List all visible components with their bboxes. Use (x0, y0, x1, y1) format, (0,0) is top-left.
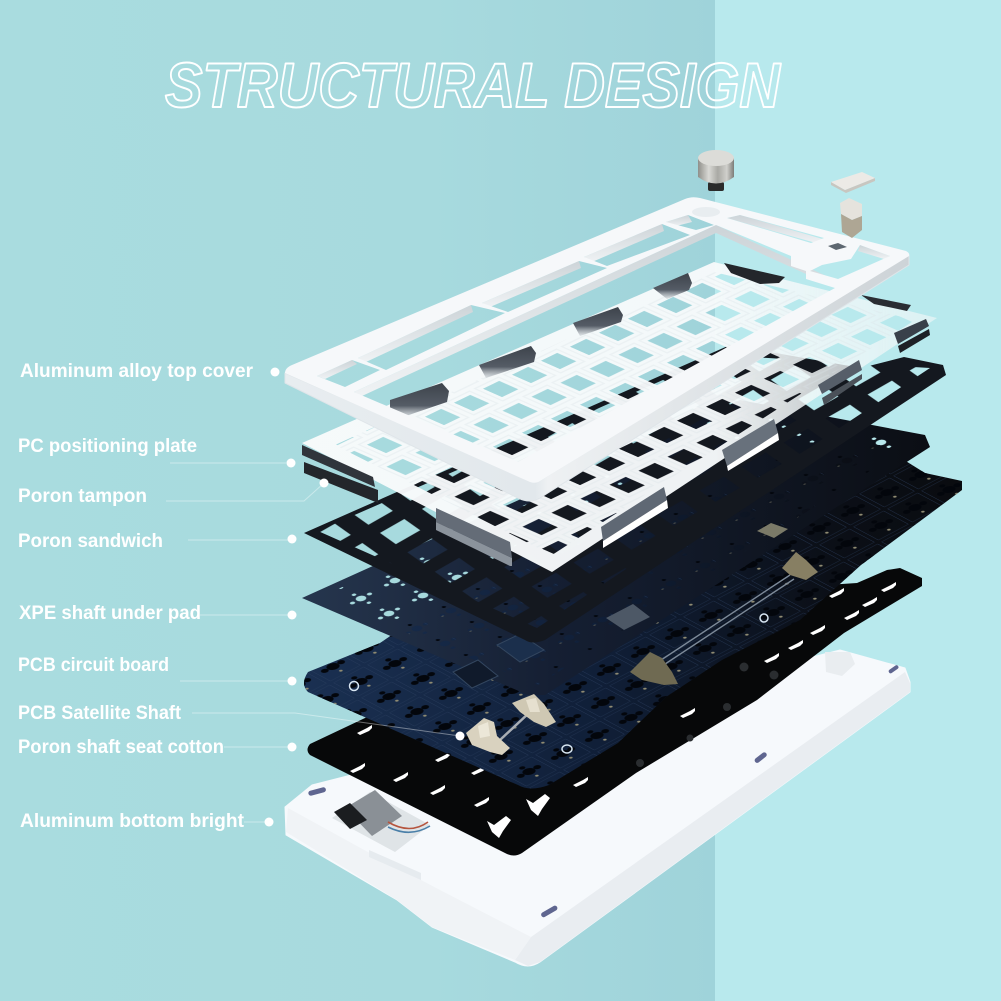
label: aluminum alloy top cover: Aluminum alloy top cover (20, 361, 254, 382)
layer: poron sandwich (304, 345, 946, 642)
case outer body (285, 650, 910, 966)
layer: aluminum alloy top cover (285, 197, 909, 501)
switch socket post (825, 652, 855, 676)
label: PCB satellite shaft (18, 703, 464, 740)
poron block left 2 (436, 508, 512, 566)
frame knob recess (692, 207, 720, 217)
cotton round holes (636, 662, 778, 767)
frame inner walls (317, 215, 890, 396)
label: aluminum bottom bright: Aluminum bottom bright (20, 811, 245, 832)
label: XPE shaft under pad (19, 603, 296, 624)
label: PCB circuit board (18, 655, 296, 686)
cap side (831, 178, 875, 193)
case inner ledge (369, 850, 421, 880)
block stem (841, 214, 862, 238)
background left wall (0, 0, 715, 1001)
title: STRUCTURAL DESIGN (165, 51, 781, 121)
stabilizer wire left (500, 712, 530, 740)
plate inner lines (340, 272, 837, 523)
stabilizer housing front (466, 718, 510, 755)
frame switch opening (828, 243, 847, 250)
label: XPE shaft under pad: XPE shaft under pad (19, 603, 201, 624)
sliding block piece (840, 198, 862, 238)
label: PC positioning plate (18, 436, 296, 468)
frame top face (285, 197, 909, 483)
pcb board (304, 440, 962, 788)
label: poron tampon (18, 478, 328, 507)
layer: aluminum bottom case (285, 650, 910, 966)
background right wall (715, 0, 1001, 1001)
stabilizer wire right (652, 575, 794, 670)
key cap piece (831, 172, 875, 193)
case right side wall (515, 672, 910, 966)
case left side wall (286, 808, 531, 960)
poron block right 1 (894, 319, 930, 353)
frame side faces (285, 255, 909, 501)
pcb switch footprints (304, 440, 962, 788)
layer: poron shaft seat cotton (308, 568, 922, 856)
poron block left 1 (302, 445, 378, 503)
layer: PCB circuit board (304, 440, 962, 788)
poron block right 2 (818, 360, 862, 405)
label: poron sandwich: Poron sandwich (18, 531, 163, 552)
block head (840, 198, 862, 220)
stabilizer housing olive upper (782, 552, 818, 580)
layer: PC positioning plate (302, 262, 937, 572)
label: PCB satellite shaft: PCB Satellite Shaft (18, 703, 182, 724)
poron block right 3 (722, 419, 779, 471)
poron block far 1 (390, 383, 449, 418)
label: poron sandwich (18, 531, 296, 552)
pcb silkscreen rings (350, 614, 768, 753)
case screw slots (308, 664, 899, 918)
cotton white slots (350, 582, 896, 838)
poron block far 2 (479, 346, 536, 378)
cap top (831, 172, 875, 190)
poron block far 4 (653, 273, 692, 299)
stabilizers (466, 552, 818, 755)
label: PCB circuit board: PCB circuit board (18, 655, 169, 676)
sandwich frame with square openings (304, 345, 946, 642)
xpe pad sheet (302, 400, 930, 695)
xpe pad windows (453, 523, 788, 688)
knob body (698, 158, 734, 184)
poron block far 5 (724, 263, 785, 284)
label: poron tampon: Poron tampon (18, 486, 147, 507)
layer: XPE shaft under pad (302, 400, 930, 695)
cable connector bay (332, 790, 430, 852)
label: PC positioning plate: PC positioning plate (18, 436, 197, 457)
cotton sheet (308, 568, 922, 856)
plate sheet with key openings (302, 262, 937, 572)
knob post (708, 182, 724, 191)
volume knob (698, 150, 734, 191)
stabilizer housing olive lower (630, 652, 678, 685)
label: poron shaft seat cotton: Poron shaft seat cotton (18, 737, 224, 758)
stabilizer housing back (512, 694, 556, 727)
poron block far 3 (573, 307, 623, 336)
poron block far 6 (861, 295, 911, 311)
knob top (698, 150, 734, 166)
poron block right 4 (601, 487, 668, 548)
